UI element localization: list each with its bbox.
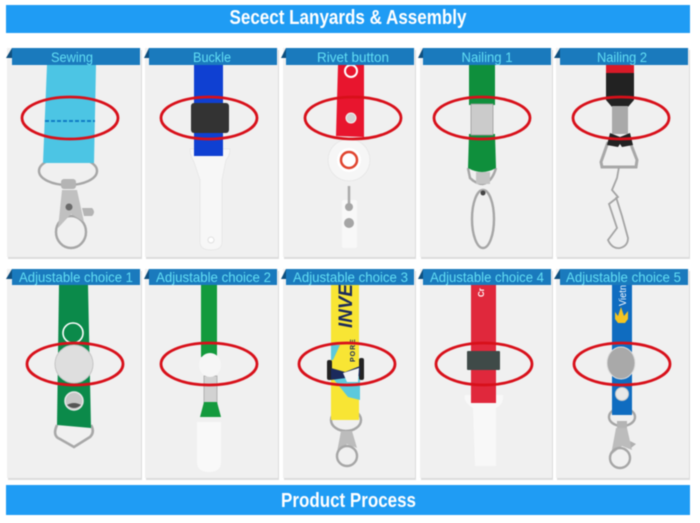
ribbon label bbox=[554, 48, 688, 65]
highlight ellipse bbox=[436, 343, 532, 385]
buckle bbox=[327, 358, 364, 382]
metal crimp bbox=[471, 104, 493, 135]
rivet bbox=[616, 388, 628, 400]
title banner bbox=[6, 5, 690, 33]
strap text: Cr bbox=[477, 288, 486, 297]
buckle bbox=[191, 103, 229, 133]
highlight ellipse bbox=[27, 343, 123, 385]
ribbon label: Adjustable choice 3 bbox=[293, 269, 408, 285]
D ring bbox=[55, 425, 93, 447]
plastic holder bbox=[190, 149, 230, 250]
ribbon label bbox=[418, 48, 551, 65]
ribbon label: Adjustable choice 4 bbox=[430, 269, 544, 285]
rivet bbox=[65, 392, 83, 410]
ribbon label: Adjustable choice 1 bbox=[19, 269, 133, 285]
badge reel bbox=[328, 139, 370, 248]
ribbon label: Adjustable choice 5 bbox=[566, 269, 681, 285]
panel: Adjustable choice 1 bbox=[6, 269, 142, 480]
lanyard strap bbox=[57, 285, 91, 428]
white bead bbox=[199, 353, 221, 377]
rivet bbox=[346, 113, 356, 123]
stitching bbox=[45, 120, 95, 122]
highlight ellipse bbox=[305, 97, 401, 139]
panel: Adjustable choice 2 bbox=[144, 269, 279, 480]
strap small text: PORE bbox=[350, 338, 357, 362]
ribbon label bbox=[144, 48, 277, 65]
lanyard strap bbox=[471, 285, 496, 403]
strap logo bbox=[63, 323, 83, 343]
lanyard strap bbox=[336, 65, 364, 137]
panel: Nailing 2 bbox=[554, 48, 690, 259]
highlight ellipse bbox=[434, 97, 530, 139]
highlight ellipse bbox=[22, 97, 118, 139]
lanyard strap bbox=[612, 285, 632, 415]
strap logo bbox=[345, 65, 357, 77]
panel: Adjustable choice 5 bbox=[554, 269, 690, 480]
ribbon label: Buckle bbox=[193, 49, 231, 65]
plastic clip bbox=[465, 395, 503, 466]
panel: Sewing bbox=[6, 48, 142, 259]
footer banner bbox=[6, 485, 690, 515]
highlight ellipse bbox=[573, 97, 669, 139]
metal disc bbox=[607, 347, 635, 379]
lanyard strap bbox=[43, 65, 96, 163]
strap text: Vietn bbox=[618, 285, 629, 306]
ring and lobster hook bbox=[331, 409, 361, 466]
ribbon label bbox=[281, 48, 414, 65]
panel: Rivet button bbox=[281, 48, 416, 259]
panel: Adjustable choice 3 bbox=[281, 269, 416, 480]
footer banner: Product Process bbox=[281, 490, 416, 512]
ribbon label: Nailing 1 bbox=[462, 49, 513, 65]
panel: Adjustable choice 4 bbox=[418, 269, 553, 480]
D ring and wire hook bbox=[601, 142, 637, 248]
cyan print bbox=[331, 345, 360, 400]
metal disc bbox=[55, 345, 93, 383]
lanyard strap bbox=[194, 65, 223, 156]
highlight ellipse bbox=[161, 343, 257, 385]
lanyard strap bbox=[606, 65, 634, 147]
ribbon label: Adjustable choice 2 bbox=[156, 269, 271, 285]
panel: Nailing 1 bbox=[418, 48, 553, 259]
title banner: Secect Lanyards & Assembly bbox=[230, 7, 467, 29]
panel: Buckle bbox=[144, 48, 279, 259]
highlight ellipse bbox=[574, 343, 670, 385]
ribbon label: Sewing bbox=[51, 49, 93, 65]
highlight ellipse bbox=[161, 97, 257, 139]
highlight ellipse bbox=[299, 343, 395, 385]
lanyard strap bbox=[201, 285, 217, 357]
metal slider bbox=[200, 376, 221, 417]
plastic clip bbox=[197, 422, 221, 472]
ribbon label: Rivet button bbox=[317, 49, 389, 65]
oval hook bbox=[468, 168, 496, 248]
lanyard strap bbox=[469, 65, 495, 105]
buckle bbox=[467, 351, 500, 370]
ribbon label: Nailing 2 bbox=[597, 49, 647, 65]
lanyard strap bbox=[331, 285, 359, 420]
ring and lobster hook bbox=[39, 157, 97, 248]
lotus logo bbox=[615, 307, 628, 323]
ribbon label bbox=[6, 48, 140, 65]
ring and lobster hook bbox=[609, 408, 636, 468]
strap text: INVE bbox=[336, 283, 357, 328]
